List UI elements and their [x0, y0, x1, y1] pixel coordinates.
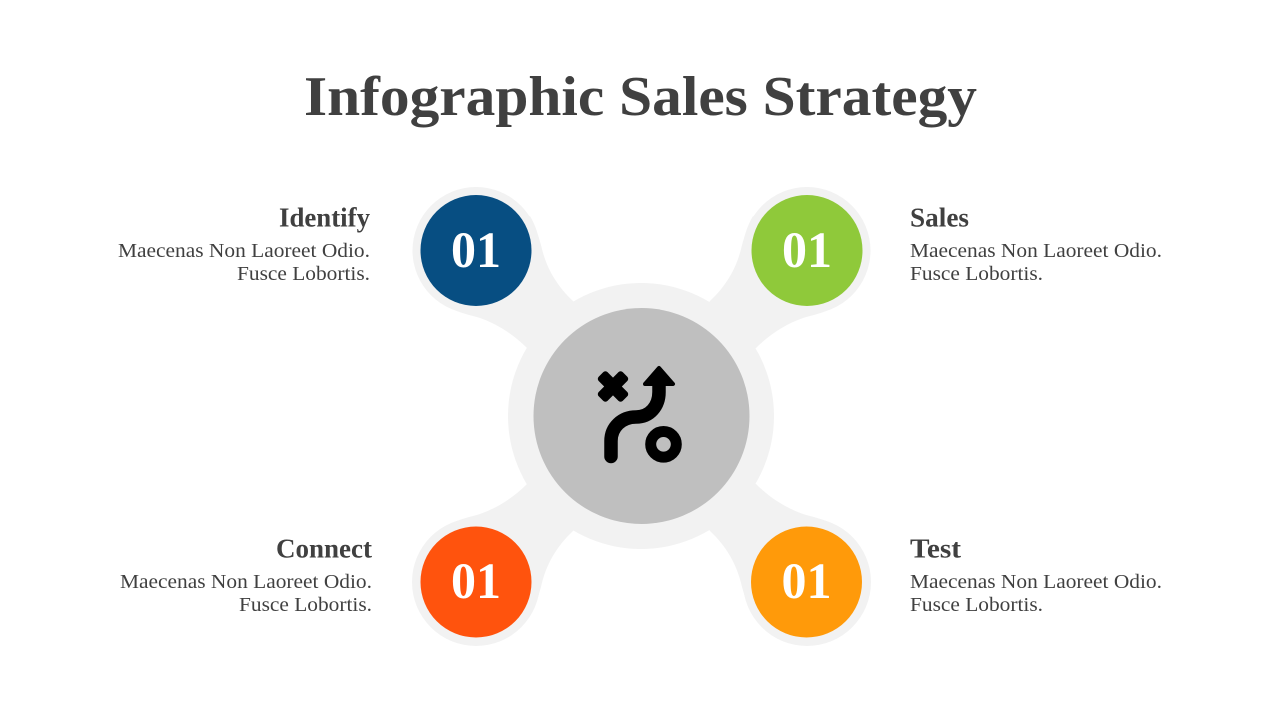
text block: connect: Maecenas Non Laoreet Odio.	[120, 571, 372, 593]
text block: test: Fusce Lobortis.	[910, 594, 1043, 616]
center circle	[534, 308, 750, 524]
text block: test	[910, 534, 1162, 616]
text block: test: Test	[910, 534, 961, 564]
text block: sales: Fusce Lobortis.	[910, 263, 1043, 285]
text block: sales	[910, 202, 1162, 285]
hub backdrop shape	[412, 187, 871, 646]
text block: sales: Sales	[910, 202, 969, 232]
text block: identify: Maecenas Non Laoreet Odio.	[118, 240, 370, 262]
text block: identify: Identify	[279, 202, 370, 232]
node: connect: 01	[451, 554, 501, 610]
text block: sales: Maecenas Non Laoreet Odio.	[910, 240, 1162, 262]
text block: identify	[118, 202, 370, 285]
text block: connect: Fusce Lobortis.	[239, 594, 372, 616]
icon: strategy route	[597, 368, 676, 457]
node: test	[751, 526, 862, 638]
text block: connect	[120, 534, 372, 616]
node: connect	[420, 526, 532, 638]
text block: connect: Connect	[276, 534, 372, 564]
text block: identify: Fusce Lobortis.	[237, 263, 370, 285]
node: sales	[752, 195, 862, 306]
node: identify: 01	[451, 223, 501, 279]
node: sales: 01	[782, 223, 832, 279]
node: test: 01	[782, 554, 832, 610]
node: identify	[420, 195, 532, 306]
title: Infographic Sales Strategy	[304, 66, 977, 128]
text block: test: Maecenas Non Laoreet Odio.	[910, 571, 1162, 593]
